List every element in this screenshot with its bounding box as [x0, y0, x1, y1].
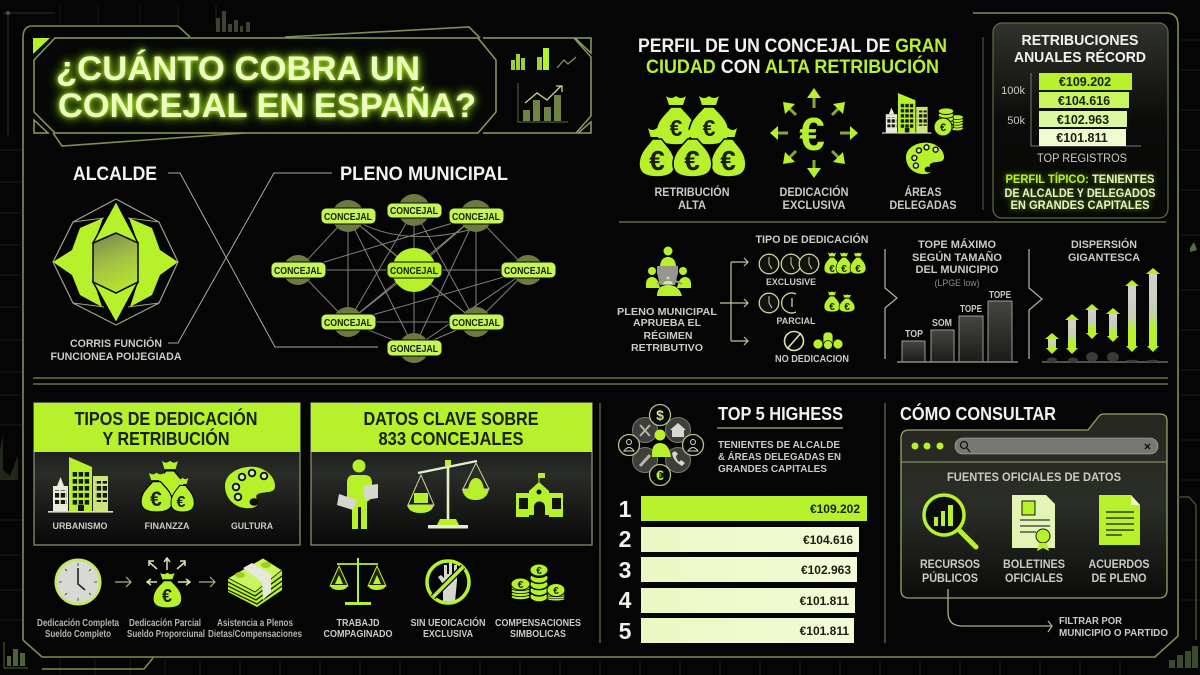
icon: buildings, coins and palette — [882, 93, 963, 174]
captions: datos clave: TRABAJD — [336, 618, 380, 629]
labels: GULTURA — [231, 521, 273, 532]
tope máximo text — [912, 238, 1002, 288]
callout: perfil típico — [1004, 171, 1156, 212]
panel: retribuciones récord: RETRIBUCIONES — [1022, 32, 1138, 49]
text: top 5 description: TENIENTES DE ALCALDE — [718, 439, 840, 451]
icon: money bags: € — [703, 115, 716, 141]
captions: datos clave: SIMBOLICAS — [510, 629, 566, 640]
text: dispersión — [1068, 238, 1140, 264]
labels: sources: RECURSOS — [920, 559, 980, 571]
icon: money bags: € — [670, 115, 683, 141]
bar chart: récord: €104.616 — [1058, 94, 1110, 108]
panel: retribuciones récord: TOP REGISTROS — [1037, 153, 1127, 165]
bar chart: tope — [897, 289, 1018, 362]
text: pleno aprueba: APRUEBA EL — [633, 317, 702, 329]
caption: alcalde: FUNCIONEA POIJEGIADA — [50, 351, 182, 363]
bar chart: top 5: €101.811 — [800, 594, 849, 608]
dividers with chevrons — [885, 249, 1042, 359]
icon: bulletin document — [1012, 495, 1055, 551]
text: pleno aprueba: RÉGIMEN — [644, 329, 692, 342]
captions: dedicación: Dedicación Completa — [37, 618, 119, 629]
text: filtrar — [1059, 615, 1168, 639]
icon: euro coins — [511, 564, 565, 602]
tope máximo text: (LPGE low) — [934, 278, 980, 288]
captions: datos clave — [324, 616, 581, 640]
captions: datos clave: EXCLUSIVA — [423, 629, 473, 640]
arrow: bracket to dedication types — [720, 258, 748, 345]
icon: money bags: € — [720, 145, 736, 176]
labels: URBANISMO — [52, 521, 108, 532]
panel: tipos de dedicación — [34, 403, 300, 545]
network diagram: pleno: CONCEJAL — [324, 318, 372, 329]
title heading: ¿CUÁNTO COBRA UN — [56, 48, 420, 88]
labels: sources: ACUERDOS — [1088, 559, 1150, 571]
icon: magnifier — [924, 495, 976, 547]
corner triangle — [33, 38, 50, 54]
bar chart: top 5: 3 — [619, 557, 631, 583]
bar chart: récord: €102.963 — [1057, 113, 1109, 127]
parcial row: € — [844, 302, 850, 313]
corner outlines — [34, 38, 591, 133]
text: pleno aprueba — [617, 306, 718, 354]
network diagram: pleno — [271, 194, 556, 363]
heading: top 5: TOP 5 HIGHESS — [718, 404, 843, 424]
callout: perfil típico: DE ALCALDE Y DELEGADOS — [1004, 186, 1156, 200]
icon: top 5 roles wheel — [618, 404, 704, 486]
labels: perfil icons: DELEGADAS — [890, 200, 957, 212]
network diagram: pleno: CONCEJAL — [452, 318, 500, 329]
text: filtrar: MUNICIPIO O PARTIDO — [1059, 627, 1168, 639]
captions: datos clave: COMPENSACIONES — [495, 618, 581, 629]
tipo de dedicación: TIPO DE DEDICACIÓN — [756, 233, 869, 246]
title banner — [33, 38, 591, 133]
exclusive row: EXCLUSIVE — [766, 277, 816, 288]
arrow — [115, 577, 131, 587]
text: top 5 description: GRANDES CAPITALES — [718, 463, 827, 475]
bar chart: récord: 50k — [1007, 115, 1025, 127]
labels: sources: DE PLENO — [1092, 573, 1147, 585]
labels: perfil icons: RETRIBUCIÓN — [654, 186, 730, 199]
icon: pleno people — [646, 246, 691, 296]
bar chart: tope: SOM — [932, 317, 952, 329]
bar chart: top 5 — [619, 496, 867, 644]
window dots — [912, 442, 944, 450]
panel: browser window: FUENTES OFICIALES DE DATOS — [947, 472, 1121, 484]
panel header: Y RETRIBUCIÓN — [102, 428, 230, 449]
labels: sources: OFICIALES — [1005, 573, 1063, 585]
icon: cash stack — [228, 558, 282, 607]
icon: buildings, coins and palette: € — [940, 122, 946, 134]
icon: money bags — [639, 96, 746, 177]
tipo de dedicación — [756, 233, 869, 365]
chart: dispersión arrows — [1042, 268, 1168, 362]
exclusive row: € — [841, 264, 847, 275]
text: top 5 description — [718, 439, 841, 475]
bar chart: récord — [1001, 73, 1141, 146]
panel: retribuciones récord: ANUALES RÉCORD — [1014, 49, 1146, 66]
heading: pleno municipal: PLENO MUNICIPAL — [340, 164, 508, 185]
bar chart: récord: 100k — [1001, 85, 1025, 97]
heading: perfil: PERFIL DE UN CONCEJAL DE GRAN — [638, 36, 947, 57]
text: pleno aprueba: PLENO MUNICIPAL — [617, 306, 718, 318]
bar chart: top 5: €102.963 — [801, 563, 851, 577]
tope máximo text: DEL MUNICIPIO — [916, 264, 999, 276]
icon: finance bags: € — [150, 488, 162, 511]
labels: perfil icons — [654, 186, 957, 212]
exclusive row — [759, 252, 866, 288]
callout: perfil típico: PERFIL TÍPICO: TENIENTES — [1006, 171, 1154, 186]
bar chart: top 5: 1 — [619, 496, 632, 522]
panel: browser window — [901, 414, 1167, 598]
labels: perfil icons: ALTA — [678, 200, 706, 212]
no dedicación row: NO DEDICACION — [775, 354, 849, 365]
caption: alcalde — [50, 337, 182, 363]
arrow — [199, 577, 215, 587]
labels: perfil icons: EXCLUSIVA — [782, 200, 846, 212]
icon: euro with arrows — [770, 88, 858, 178]
icon: euro coins: € — [536, 566, 542, 577]
icon: wall clock — [56, 560, 100, 604]
captions: dedicación: Asistencia a Plenos — [217, 618, 293, 629]
search bar — [955, 438, 1158, 454]
icon: no sign hand — [427, 561, 469, 603]
bar chart: top 5: €104.616 — [803, 533, 853, 547]
icon: finance bags — [141, 461, 194, 512]
captions: dedicación — [37, 618, 302, 640]
icon: school — [516, 473, 563, 517]
text: filtrar: FILTRAR POR — [1059, 615, 1122, 627]
heading: perfil — [638, 36, 947, 78]
bar chart: tope: TOPE — [989, 289, 1011, 301]
panel header — [34, 403, 300, 452]
icon: euro coins: € — [553, 586, 559, 597]
icon: buildings — [48, 457, 113, 513]
captions: dedicación: Dedicación Parcial — [129, 618, 201, 629]
text: pleno aprueba: RETRIBUTIVO — [631, 342, 703, 354]
labels: sources: BOLETINES — [1003, 559, 1065, 571]
icon: finance bags: € — [177, 494, 186, 511]
panel: retribuciones récord — [993, 23, 1168, 218]
labels: sources: PÚBLICOS — [922, 572, 978, 585]
text: top 5 description: & ÁREAS DELEGADAS EN — [718, 450, 841, 463]
labels: sources — [920, 559, 1150, 585]
heading: alcalde: ALCALDE — [73, 164, 157, 185]
bar chart: top 5: 4 — [619, 587, 632, 613]
bar chart: top 5: 5 — [619, 618, 632, 644]
network diagram: pleno: CONCEJAL — [324, 212, 372, 223]
heading: cómo consultar: CÓMO CONSULTAR — [900, 403, 1056, 424]
panel header: TIPOS DE DEDICACIÓN — [74, 408, 258, 429]
icon: money bags: € — [684, 145, 700, 176]
icon: small scales — [330, 558, 386, 605]
labels: perfil icons: ÁREAS — [904, 186, 942, 199]
title heading — [56, 48, 476, 125]
parcial row: PARCIAL — [776, 316, 816, 327]
panel header: 833 CONCEJALES — [378, 429, 524, 449]
icon: palette — [225, 467, 275, 508]
heading: perfil: CIUDAD CON ALTA RETRIBUCIÓN — [646, 56, 939, 78]
icons: mini charts — [511, 48, 576, 122]
icon: euro with arrows: € — [799, 108, 825, 160]
icon: balance — [407, 460, 489, 528]
bar chart: top 5: €109.202 — [810, 502, 860, 516]
labels: perfil icons: DEDICACIÓN — [780, 186, 848, 199]
captions: dedicación: Sueldo Proporciunal — [127, 629, 205, 640]
labels: FINANZZA — [144, 521, 190, 532]
title heading: CONCEJAL EN ESPAÑA? — [58, 86, 476, 125]
network diagram: pleno: GONCEJAL — [390, 344, 438, 355]
callout: perfil típico: EN GRANDES CAPITALES — [1010, 198, 1150, 212]
icon: bag with arrows — [147, 558, 190, 608]
bar chart: récord: €101.811 — [1056, 131, 1108, 145]
bar chart: tope: TOPE — [960, 303, 982, 315]
panel header: DATOS CLAVE SOBRE — [364, 409, 538, 429]
captions: dedicación: Dietas/Compensaciones — [208, 629, 302, 640]
icon: money bags: € — [649, 145, 665, 176]
exclusive row: € — [829, 264, 835, 275]
parcial row: € — [829, 302, 835, 313]
labels — [52, 521, 273, 532]
exclusive row: € — [855, 264, 861, 275]
panel header — [311, 403, 592, 452]
caption: alcalde: CORRIS FUNCIÓN — [70, 337, 162, 350]
tope máximo text: SEGÚN TAMAÑO — [912, 251, 1002, 264]
connector X lines — [168, 173, 378, 347]
icon: top 5 roles wheel: € — [656, 467, 664, 483]
bar chart: tope: TOP — [905, 328, 923, 340]
bar chart: récord: €109.202 — [1059, 75, 1111, 89]
network diagram: pleno: CONCEJAL — [390, 266, 438, 277]
captions: datos clave: COMPAGINADO — [324, 629, 393, 640]
captions: dedicación: Sueldo Completo — [45, 629, 111, 640]
network diagram: pleno: CONCEJAL — [504, 266, 552, 277]
icon: person with papers — [337, 460, 378, 529]
arrow: filter connector — [948, 589, 1052, 632]
network diagram: pleno: CONCEJAL — [274, 266, 322, 277]
panel: datos clave — [311, 403, 592, 545]
text: dispersión: DISPERSIÓN — [1071, 238, 1137, 251]
icon: euro coins: € — [518, 580, 524, 591]
network diagram: pleno: CONCEJAL — [390, 206, 438, 217]
text: dispersión: GIGANTESCA — [1068, 252, 1140, 264]
parcial row — [759, 291, 855, 327]
tope máximo text: TOPE MÁXIMO — [918, 238, 996, 251]
bar chart: top 5: 2 — [619, 526, 631, 552]
icon: top 5 roles wheel: $ — [656, 407, 664, 423]
network diagram: pleno: CONCEJAL — [452, 212, 500, 223]
icon: bag with arrows: € — [162, 586, 172, 606]
bar chart: top 5: €101.811 — [800, 624, 849, 638]
captions: datos clave: SIN UEOICACIÓN — [410, 616, 486, 629]
icon: agreement document — [1099, 495, 1140, 545]
icon: alcalde star emblem — [53, 199, 178, 325]
